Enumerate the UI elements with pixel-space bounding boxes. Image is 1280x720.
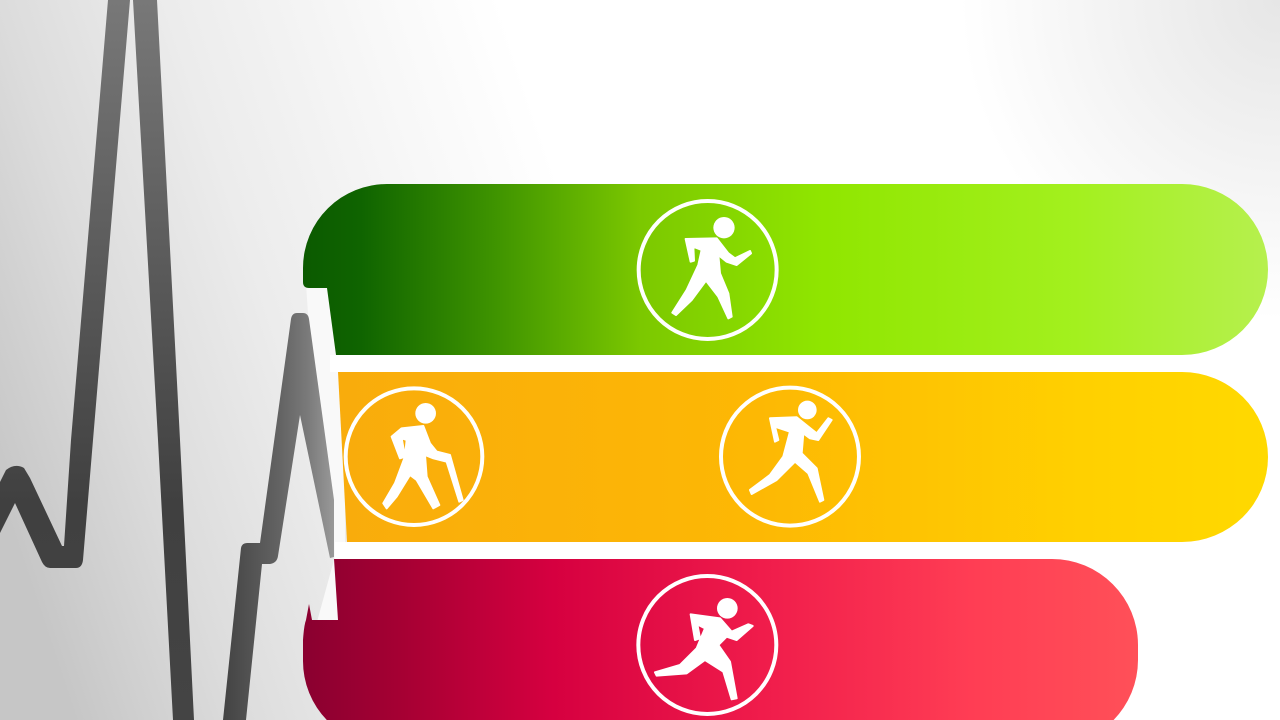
white gaps between bars: [330, 355, 900, 559]
white halo behind pulse peak: [306, 284, 345, 640]
background corner shading: [900, 0, 1280, 330]
panel: green bar: [303, 184, 1268, 355]
icon: walker with cane: [346, 388, 482, 525]
chart: heartbeat peak: [223, 313, 334, 720]
icon: jogger: [721, 388, 859, 526]
chart: heartbeat line left: [0, 0, 194, 720]
panel: yellow bar: [338, 372, 1268, 542]
icon: sprinter: [638, 576, 776, 714]
icon: brisk walker: [639, 201, 777, 339]
panel: red bar: [303, 559, 1138, 720]
